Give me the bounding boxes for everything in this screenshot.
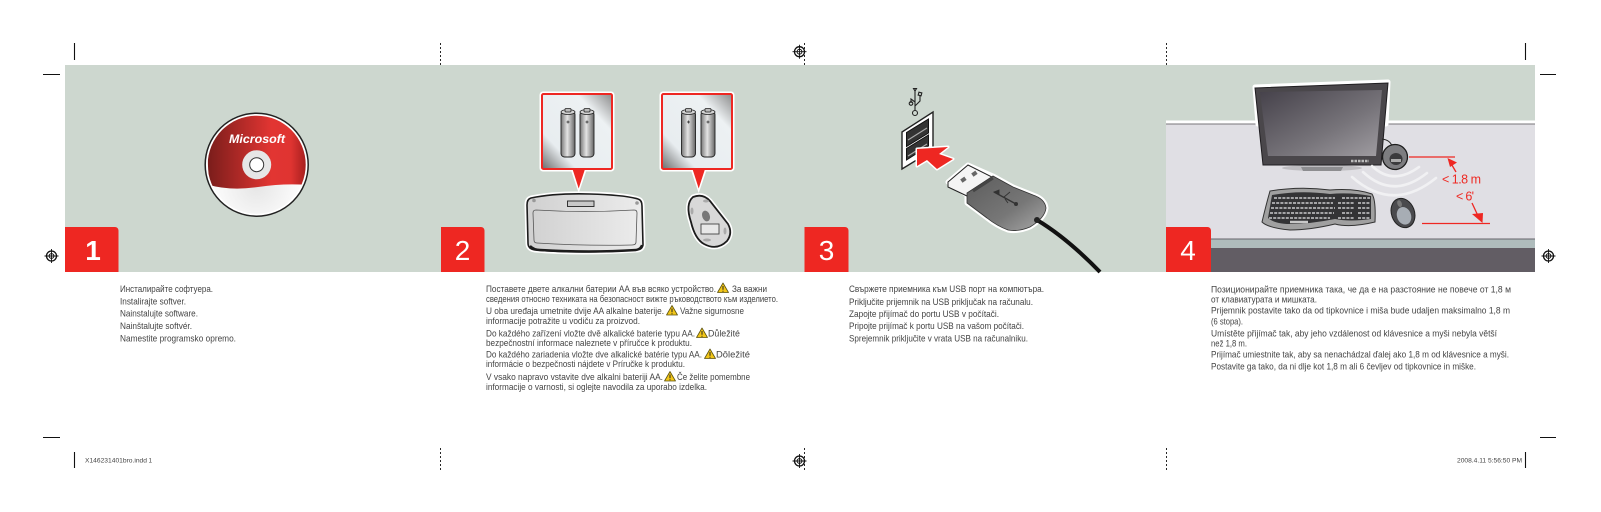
text block: step 4: (6 stopa). (1211, 316, 1243, 326)
step number 2 (441, 227, 484, 272)
text block: step 2: За важни (732, 284, 767, 294)
text block: step 4: Prijemnik postavite tako da od tipkovnice i miša bude udaljen maksimalno 1,8 m (1211, 306, 1510, 316)
text block: step 2: Važne sigurnosne (680, 306, 744, 316)
text block: step 2: Do každého zařízení vložte dvě alkalické baterie typu AA. (486, 329, 695, 339)
step number 4: 4 (1180, 235, 1196, 266)
footer: timestamp: 2008.4.11 5:56:50 PM (1457, 458, 1522, 464)
icon: monitor (1255, 82, 1388, 171)
text block: step 3 (849, 284, 1044, 344)
text block: step 4: než 1,8 m. (1211, 338, 1247, 348)
text block: step 3: Zapojte přijímač do portu USB v počítači. (849, 309, 999, 319)
icon: wireless receiver (1382, 139, 1408, 170)
step number 4 (1166, 227, 1211, 272)
callout: keyboard batteries (541, 93, 613, 188)
text block: step 2: V vsako napravo vstavite dve alkalni bateriji AA. (486, 372, 663, 382)
text block: step 1: Nainštalujte softvér. (120, 321, 192, 331)
icon: USB symbol (909, 88, 922, 116)
background band (65, 65, 1535, 272)
step number 1 (65, 227, 118, 272)
text block: step 4 (1211, 284, 1511, 372)
distance marker with arrows and labels: < 1.8 m (1442, 172, 1481, 186)
icon: wireless keyboard (1262, 188, 1375, 230)
text block: step 2: U oba uređaja umetnite dvije AA alkalne baterije. (486, 306, 664, 316)
text block: step 1 (120, 284, 236, 344)
crop marks (43, 43, 1556, 470)
text block: step 4: Позиционирайте приемника така, че да е на разстояние не повече от 1,8 м (1211, 284, 1511, 294)
icon: wireless mouse (1387, 195, 1419, 231)
callout: mouse batteries (661, 93, 733, 188)
arrow: insert receiver (917, 147, 953, 169)
text block: step 2: bezpečnostní informace naleznete v příručce k produktu. (486, 338, 692, 348)
text block: step 2: сведения относно техниката на безопасност вижте ръководството към изделието. (486, 294, 778, 304)
icon: mouse underside (688, 196, 730, 247)
footer: file name: X146231401bro.indd (85, 458, 147, 464)
text block: step 1: Инсталирайте софтуера. (120, 284, 213, 294)
text block: step 2: Če želite pomembne (677, 372, 750, 382)
text block: step 2 (486, 283, 778, 392)
text block: step 4: Umístěte přijímač tak, aby jeho vzdálenost od klávesnice a myši nebyla větší (1211, 328, 1498, 338)
icon: USB ports (902, 112, 933, 169)
step number 1: 1 (85, 235, 101, 266)
distance marker with arrows and labels (1409, 157, 1490, 224)
icon: Microsoft CD (205, 113, 308, 216)
text block: step 4: Postavite ga tako, da ni dlje kot 1,8 m ali 6 čevljev od tipkovnice in miške. (1211, 362, 1476, 372)
text block: step 2: Důležité (708, 329, 740, 339)
footer: page number: 1 (148, 458, 152, 464)
step number 3 (804, 227, 848, 272)
text block: step 1: Nainstalujte software. (120, 308, 198, 318)
text block: step 1: Namestite programsko opremo. (120, 334, 236, 344)
text block: step 2: Поставете двете алкални батерии АА във всяко устройство. (486, 284, 716, 294)
text block: step 3: Свържете приемника към USB порт на компютъра. (849, 284, 1044, 294)
text block: step 2: Dôležité (716, 350, 750, 360)
icon: Microsoft CD: Microsoft (229, 134, 286, 146)
distance marker with arrows and labels: < 6' (1456, 190, 1474, 204)
text block: step 2: informacije potražite u vodiču za proizvod. (486, 316, 640, 326)
text block: step 3: Pripojte prijímač k portu USB na vašom počítači. (849, 321, 1024, 331)
step number 2: 2 (455, 235, 470, 266)
text block: step 3: Sprejemnik priključite v vrata USB na računalniku. (849, 334, 1028, 344)
text block: step 1: Instalirajte softver. (120, 296, 186, 306)
icon: keyboard underside (527, 194, 643, 252)
text block: step 2: informácie o bezpečnosti nájdete v Príručke k produktu. (486, 359, 685, 369)
text block: step 4: от клавиатурата и мишката. (1211, 294, 1317, 304)
text block: step 4: Prijímač umiestnite tak, aby sa nenachádzal ďalej ako 1,8 m od klávesnice a myši. (1211, 350, 1509, 360)
panel 4 desk scene background (1166, 120, 1535, 272)
text block: step 2: Do každého zariadenia vložte dve alkalické batérie typu AA. (486, 350, 702, 360)
icon: USB receiver with cord (948, 165, 1100, 272)
registration marks (44, 45, 1556, 468)
text block: step 2: informacije o varnosti, si oglejte navodila za uporabo izdelka. (486, 382, 707, 392)
step number 3: 3 (819, 235, 834, 266)
wireless signal waves (1352, 166, 1436, 195)
text block: step 3: Priključite prijemnik na USB priključak na računalu. (849, 297, 1033, 307)
